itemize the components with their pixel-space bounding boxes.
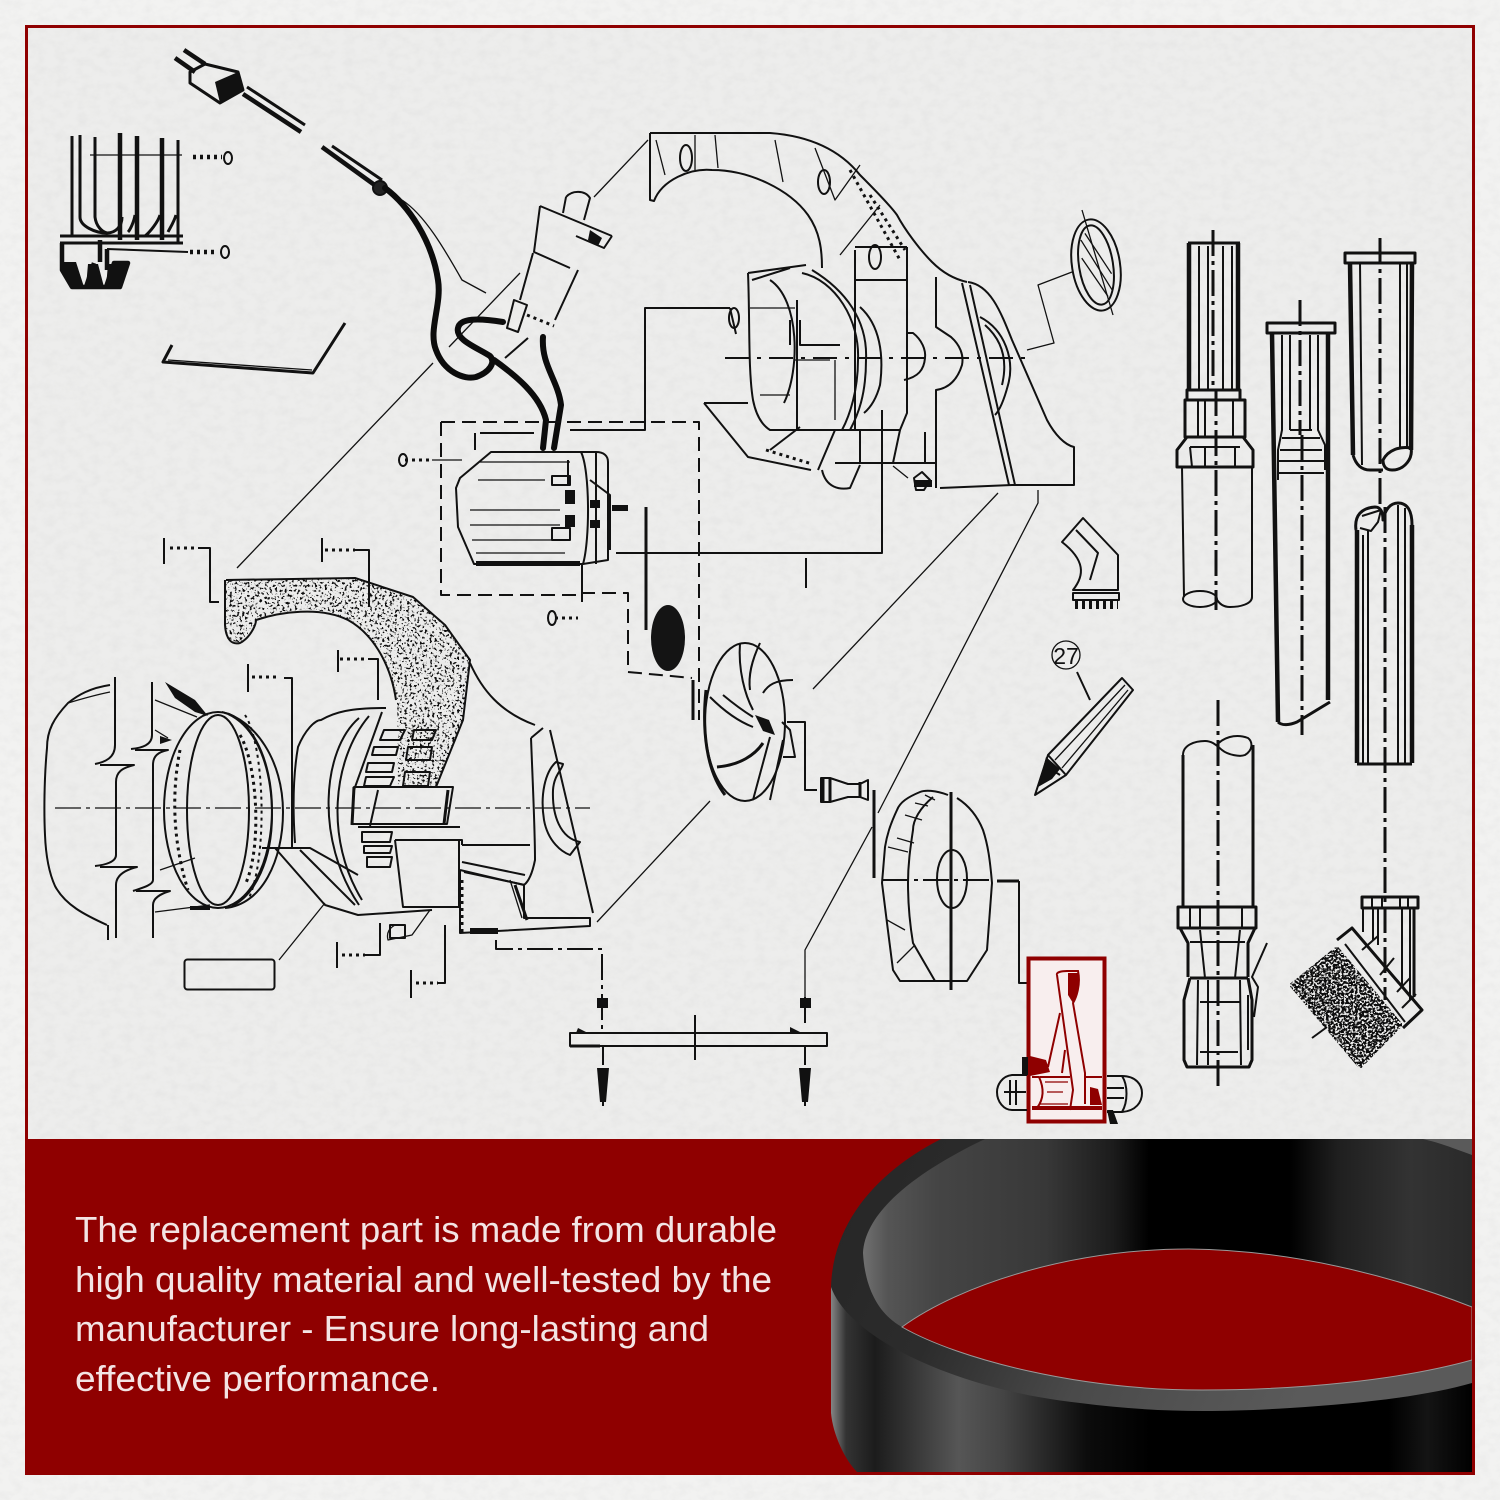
caption text: effective performance. [75, 1358, 440, 1399]
crevice tool [1035, 672, 1133, 795]
elbow brush [1290, 897, 1422, 1068]
extension tube 1 [1177, 230, 1267, 1088]
callout number 27: 27 [1053, 643, 1079, 669]
gasket [1065, 216, 1127, 314]
mounting bracket top left [60, 133, 232, 287]
alignment rod [163, 323, 345, 373]
exploded parts diagram [44, 50, 1422, 1124]
belt outer wall [831, 1287, 1472, 1472]
lower screws and leaders [164, 538, 445, 998]
bottom mounting bar and fasteners [496, 940, 827, 1106]
long leader lines [237, 363, 1038, 997]
dark grommet [651, 605, 685, 671]
red caption band [28, 1139, 1472, 1472]
belt part in red [1030, 971, 1102, 1110]
upper housing half [650, 133, 1074, 490]
caption text: The replacement part is made from durable [75, 1209, 777, 1250]
diagram panel paper [28, 28, 1472, 1139]
extension tube 3 lower [1356, 503, 1412, 1000]
lower left dashed center line [55, 807, 590, 809]
lower housing half outline [225, 578, 593, 960]
filter wheel [882, 791, 1052, 990]
belt roller end caps [997, 1057, 1142, 1124]
switch assembly [505, 140, 648, 358]
ring with bracket top [155, 682, 283, 912]
small crevice brush [1062, 518, 1119, 605]
lower housing half handle [225, 578, 470, 787]
plug and cord [175, 50, 561, 448]
belt inner wall [863, 1139, 1472, 1326]
caption text: manufacturer - Ensure long-lasting and [75, 1308, 709, 1349]
highlighted belt part box [1028, 958, 1104, 1122]
belt top rim [831, 1139, 1472, 1411]
motor and leaders [399, 308, 882, 720]
fan [705, 643, 817, 801]
extension tube 2 [1267, 300, 1335, 735]
coupling [821, 778, 874, 878]
belt photo [831, 1139, 1472, 1472]
left shroud [44, 677, 170, 940]
label plate [184, 960, 274, 990]
caption text: high quality material and well-tested by the [75, 1259, 772, 1300]
belt opening [902, 1249, 1472, 1390]
extension tube 3 upper [1345, 238, 1415, 507]
gasket leader [1027, 210, 1113, 350]
